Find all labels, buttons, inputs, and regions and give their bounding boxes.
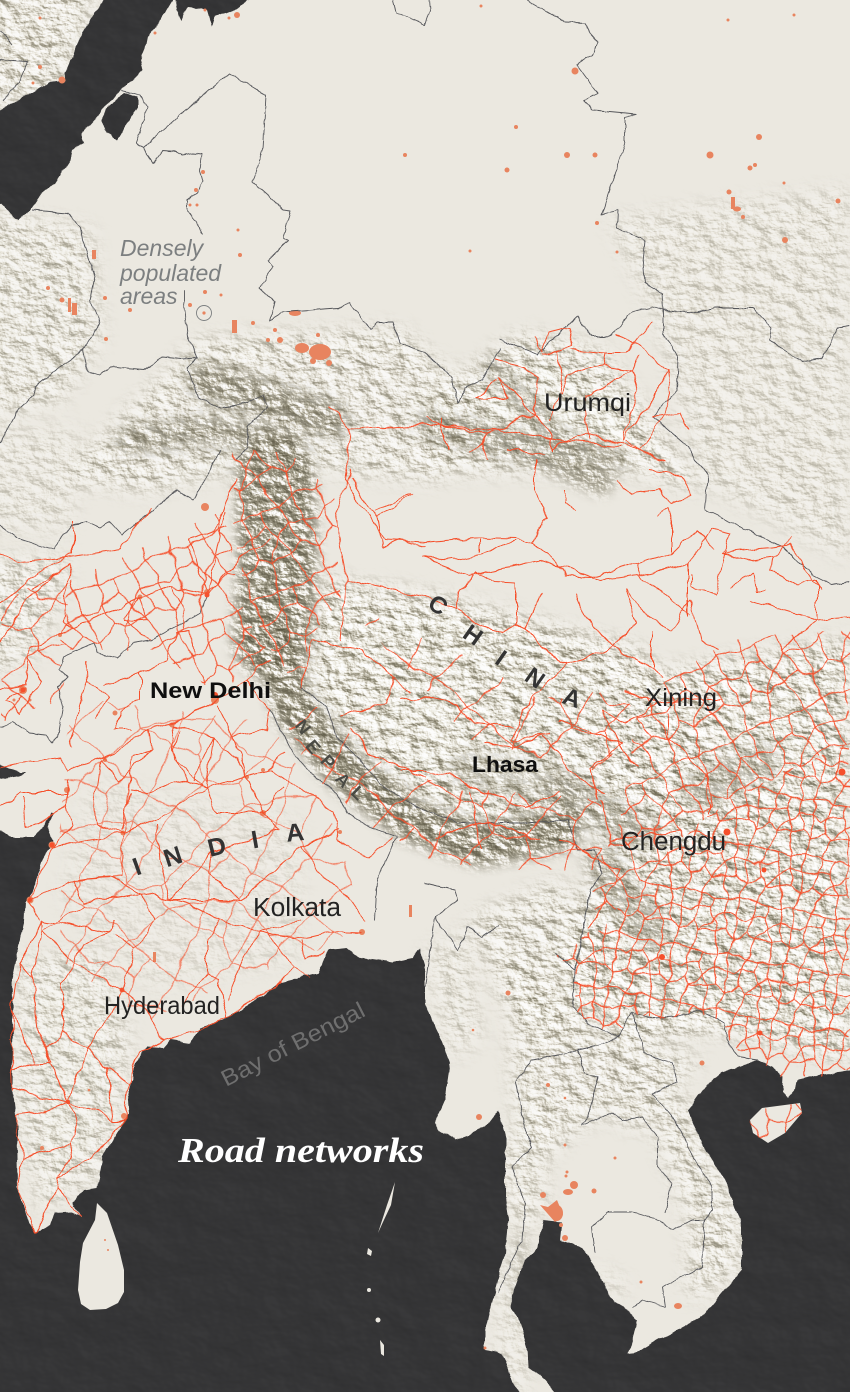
label: Nepal: E [301, 736, 325, 758]
road networks: main roads, India, Pakistan [0, 632, 393, 932]
label: India: N [160, 841, 186, 873]
label: India: I [249, 826, 261, 854]
annotation: densely populated areas: populated [119, 260, 222, 286]
label: Chengdu: Chengdu [621, 828, 726, 856]
annotation: densely populated areas [119, 235, 222, 320]
annotation: densely populated areas: Densely [120, 235, 205, 261]
road networks: main roads, Pakistan and Himalayan foothills [0, 470, 425, 777]
label: Bay of Bengal: Bay of Bengal [216, 997, 369, 1091]
title: Road networks: Road networks [177, 1131, 424, 1170]
label: India: D [205, 831, 229, 863]
road networks: sparse web, Tibet, Nepal, India plains and foothills [0, 560, 640, 1020]
label: China: H [458, 619, 488, 651]
annotation: densely populated areas: areas [120, 283, 178, 309]
label: India [129, 818, 305, 881]
label: Nepal: A [331, 768, 355, 792]
road networks: dense web, south-east China [558, 745, 850, 1078]
label: Xining: Xining [645, 684, 717, 712]
label: New Delhi: New Delhi [150, 678, 271, 703]
road networks: main roads, south India [12, 900, 363, 1233]
label: China: N [520, 662, 550, 694]
label: China: I [490, 645, 511, 671]
label: Nepal: N [291, 716, 315, 738]
label: India: I [129, 853, 145, 881]
label: Kolkata: Kolkata [253, 894, 342, 922]
label: Nepal [291, 716, 369, 804]
label: Nepal: L [347, 782, 369, 804]
label: Urumqi: Urumqi [544, 389, 631, 417]
road hubs [20, 592, 846, 1104]
label: Hyderabad: Hyderabad [104, 992, 220, 1020]
label: Lhasa: Lhasa [472, 752, 539, 777]
road networks: main roads, Xinjiang and Tarim ring [330, 320, 850, 650]
shaded relief: high mountain ranges [110, 351, 782, 1307]
label: Nepal: P [317, 751, 339, 773]
label: China: A [559, 683, 585, 714]
road networks: medium web, central China, Punjab and Himalaya [60, 450, 850, 1143]
label: China [423, 589, 585, 714]
islands: Sri Lanka, Hainan and Andaman chain [78, 1103, 802, 1356]
label: China: C [423, 589, 453, 621]
road networks: main roads, Tibet and Qinghai [400, 558, 720, 930]
label: India: A [285, 818, 305, 848]
